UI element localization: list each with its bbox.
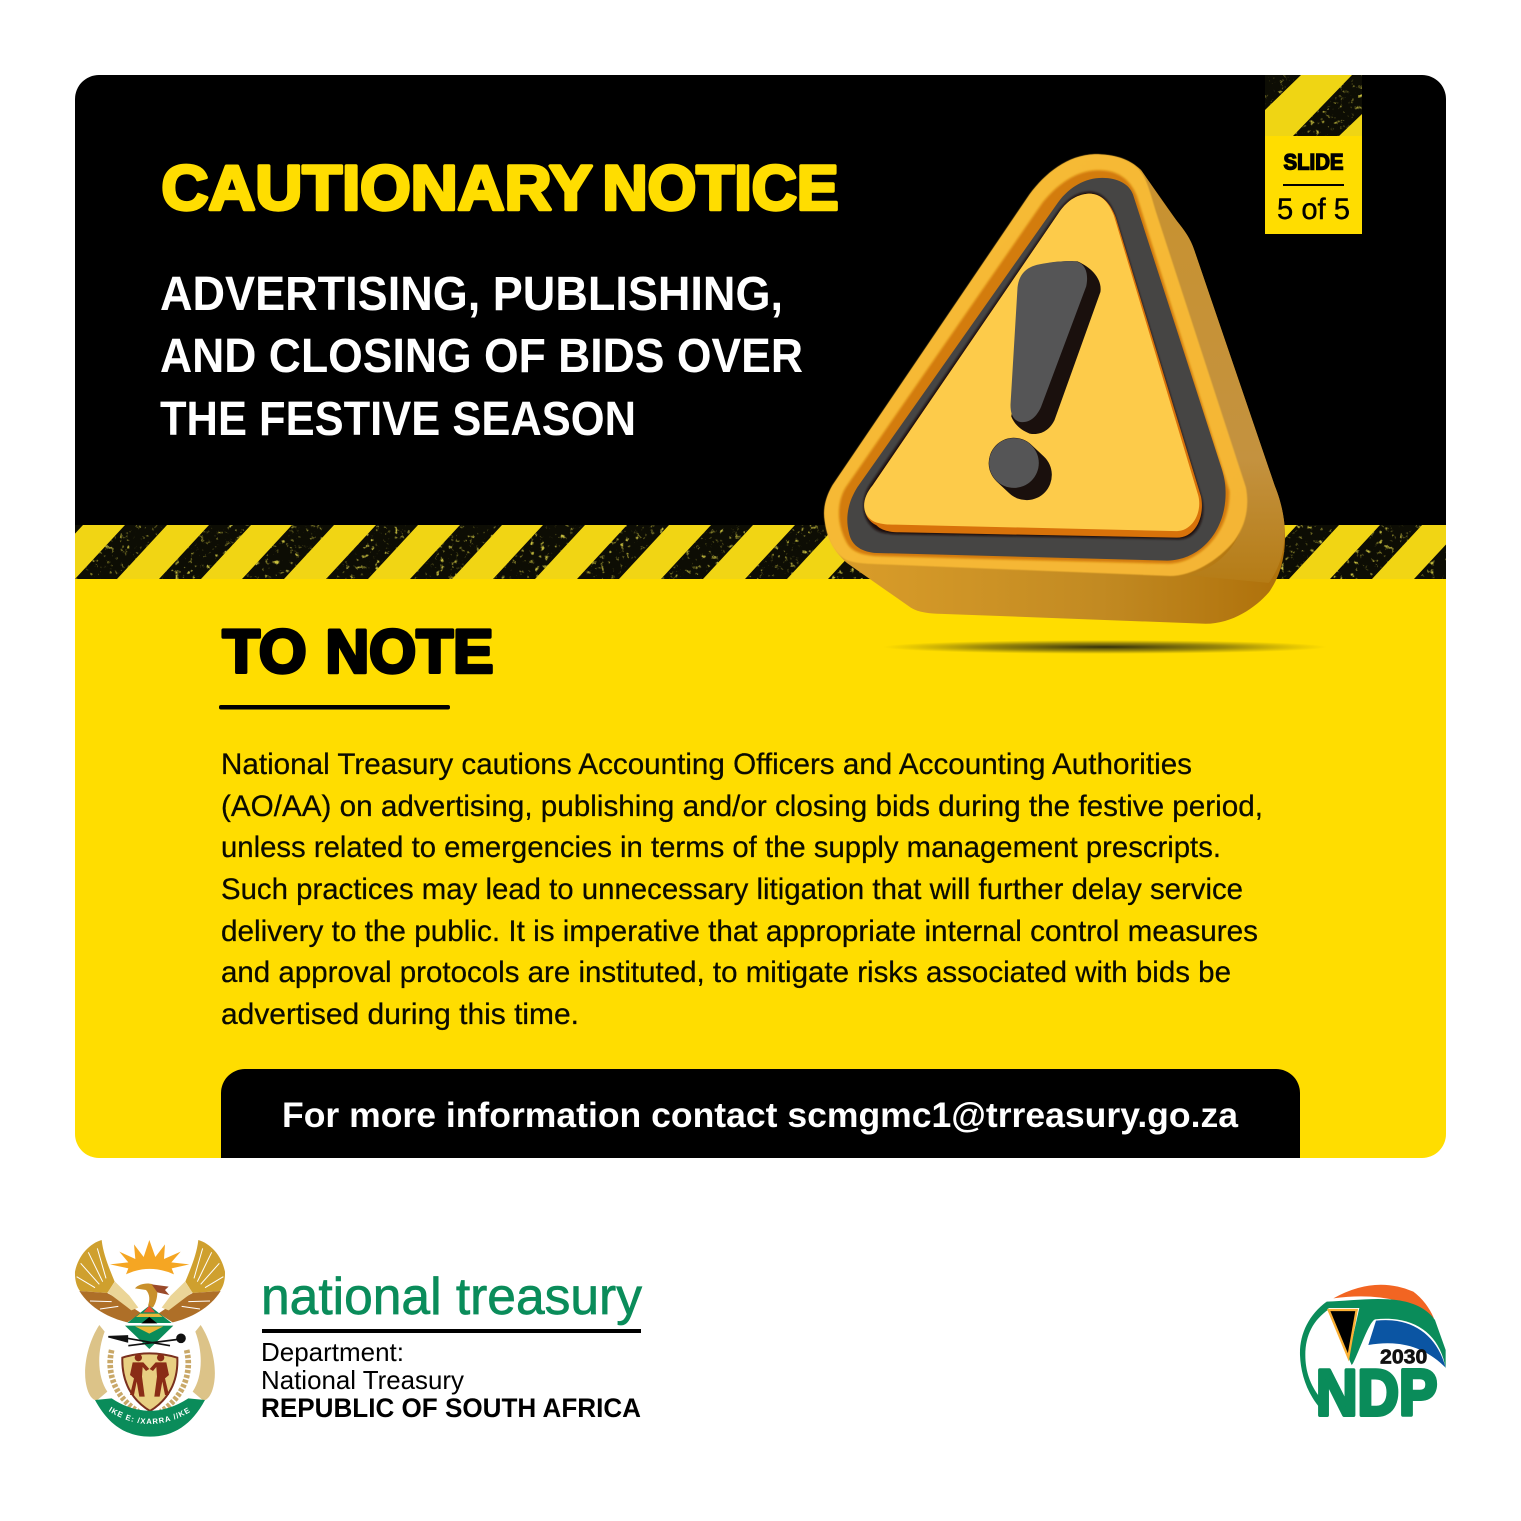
body text: unless related to emergencies in terms of the supply management prescripts. [221,831,1221,864]
motto banner [95,1398,205,1437]
NDP lettering: NDP [1316,1356,1437,1429]
motto banner: IKE E: /XARRA //KE [108,1406,190,1424]
left tusk [85,1325,107,1401]
heading: to note: TO [222,618,306,686]
panel: black header [75,75,1446,525]
sun [110,1240,189,1274]
logo: national treasury wordmark: Department: [261,1337,404,1367]
2030 lettering: 2030 [1380,1346,1427,1369]
green ring [1300,1302,1329,1410]
right wing [159,1240,225,1322]
right tusk [193,1325,215,1401]
title [162,154,838,224]
body text [221,748,1263,1031]
body text: delivery to the public. It is imperative that appropriate internal control measures [221,915,1258,948]
diamond emblem [125,1306,173,1349]
body text: Such practices may lead to unnecessary litigation that will further delay service [221,873,1243,906]
body text: National Treasury cautions Accounting Officers and Accounting Authorities [221,748,1192,781]
logo: coat of arms [74,1240,225,1437]
slide badge: SLIDE [1284,150,1344,174]
panel: notice card [0,75,1500,1158]
logo: national treasury wordmark: national treasury [261,1268,642,1326]
left wing [75,1240,141,1322]
floor shadow [883,640,1327,654]
shield [122,1353,177,1411]
subtitle: AND CLOSING OF BIDS OVER [160,330,803,383]
slide badge [1265,75,1362,234]
body text: (AO/AA) on advertising, publishing and/or closing bids during the festive period, [221,790,1263,823]
secretary bird [135,1284,169,1308]
contact bar [221,1069,1300,1158]
subtitle [160,268,803,446]
hazard stripe band [0,525,1500,579]
title: NOTICE [602,154,838,224]
icon: warning triangle [824,154,1285,624]
logo: national treasury wordmark [261,1268,642,1423]
exclamation mark [989,261,1101,488]
logo: national treasury wordmark: National Treasury [261,1365,464,1395]
spear and knobkerrie [108,1334,185,1346]
subtitle: ADVERTISING, PUBLISHING, [160,268,783,321]
slide badge: 5 of 5 [1277,193,1350,226]
contact bar: For more information contact scmgmc1@trreasury.go.za [282,1096,1239,1135]
title: CAUTIONARY [162,154,592,224]
wheat [110,1350,188,1412]
logo: NDP 2030 [1300,1285,1446,1429]
logo: national treasury wordmark: REPUBLIC OF SOUTH AFRICA [261,1393,641,1423]
blue band [1368,1320,1446,1368]
heading: to note: NOTE [326,618,494,686]
body text: advertised during this time. [221,998,579,1031]
body text: and approval protocols are instituted, to mitigate risks associated with bids be [221,956,1231,989]
shield figures [130,1354,169,1397]
green flag band [1327,1299,1446,1368]
panel: yellow body [75,579,1446,1158]
heading rule [219,705,450,710]
orange arc [1333,1285,1434,1318]
heading: to note [222,618,494,686]
subtitle: THE FESTIVE SEASON [160,393,636,446]
black flag triangle [1329,1310,1357,1357]
